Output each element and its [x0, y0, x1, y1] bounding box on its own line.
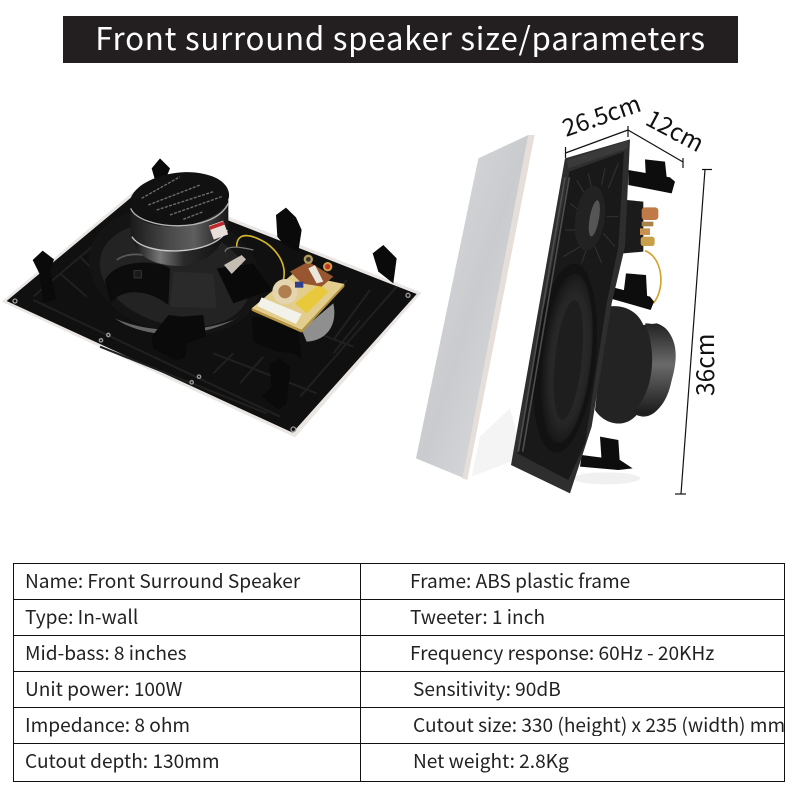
- dimension lines: [566, 126, 712, 494]
- dimension label: 12cm: 12cm: [641, 99, 711, 159]
- spec: type: Type: In-wall: [25, 602, 138, 630]
- bottom clamp: [580, 437, 633, 470]
- tweeter: [571, 184, 609, 253]
- grille shadow: [472, 408, 523, 477]
- spec: unit power: Unit power: 100W: [25, 674, 182, 702]
- grille edge: [462, 135, 535, 480]
- height dimension line: [675, 170, 712, 494]
- woofer cone: [525, 261, 605, 456]
- spec: frame: Frame: ABS plastic frame: [410, 566, 630, 594]
- width dimension line: [566, 130, 628, 158]
- right speaker: grille panel: [416, 135, 535, 480]
- frame bevel: [518, 177, 569, 452]
- right speaker: side/front view: [511, 139, 676, 493]
- spec: frequency response: Frequency response: 60Hz - 20KHz: [410, 638, 714, 666]
- frame body: [511, 139, 630, 493]
- radial ribs around tweeter: [563, 163, 618, 263]
- mid clamp: [610, 273, 654, 310]
- magnet top with label: [126, 167, 232, 232]
- wires and terminal: [224, 236, 284, 280]
- top clamp: [628, 159, 675, 193]
- left speaker: rear view: [2, 158, 422, 437]
- woofer magnet from side: [595, 306, 675, 424]
- speaker black back plate: [7, 187, 417, 433]
- dimension label: 26.5cm: 26.5cm: [557, 84, 645, 144]
- specification table: [13, 563, 785, 782]
- spec: net weight: Net weight: 2.8Kg: [413, 746, 569, 774]
- title banner: Front surround speaker size/parameters: [95, 15, 706, 60]
- inner baffle: [517, 152, 624, 480]
- spec: mid-bass: Mid-bass: 8 inches: [25, 638, 187, 666]
- spec: impedance: Impedance: 8 ohm: [25, 710, 190, 738]
- spec: name: Name: Front Surround Speaker: [25, 566, 300, 594]
- plate ribs: [33, 240, 397, 417]
- mounting clamps: [33, 158, 397, 410]
- mounting screws: [13, 293, 410, 432]
- floor shadow: [573, 472, 640, 484]
- spec: sensitivity: Sensitivity: 90dB: [413, 674, 561, 702]
- yellow wire: [645, 251, 661, 303]
- woofer magnet: [126, 167, 232, 266]
- tweeter below board: [302, 303, 334, 342]
- depth dimension line: [628, 126, 683, 168]
- woofer basket: [75, 189, 275, 354]
- spec: cutout depth: Cutout depth: 130mm: [25, 746, 220, 774]
- warning sticker: [209, 221, 228, 240]
- spec: tweeter: Tweeter: 1 inch: [410, 602, 545, 630]
- dimension label: 36cm: 36cm: [687, 334, 722, 396]
- speaker white frame: [2, 183, 422, 437]
- terminal block: [623, 200, 658, 253]
- crossover board: [252, 255, 344, 333]
- grille face: [416, 135, 528, 478]
- top lip: [567, 141, 628, 168]
